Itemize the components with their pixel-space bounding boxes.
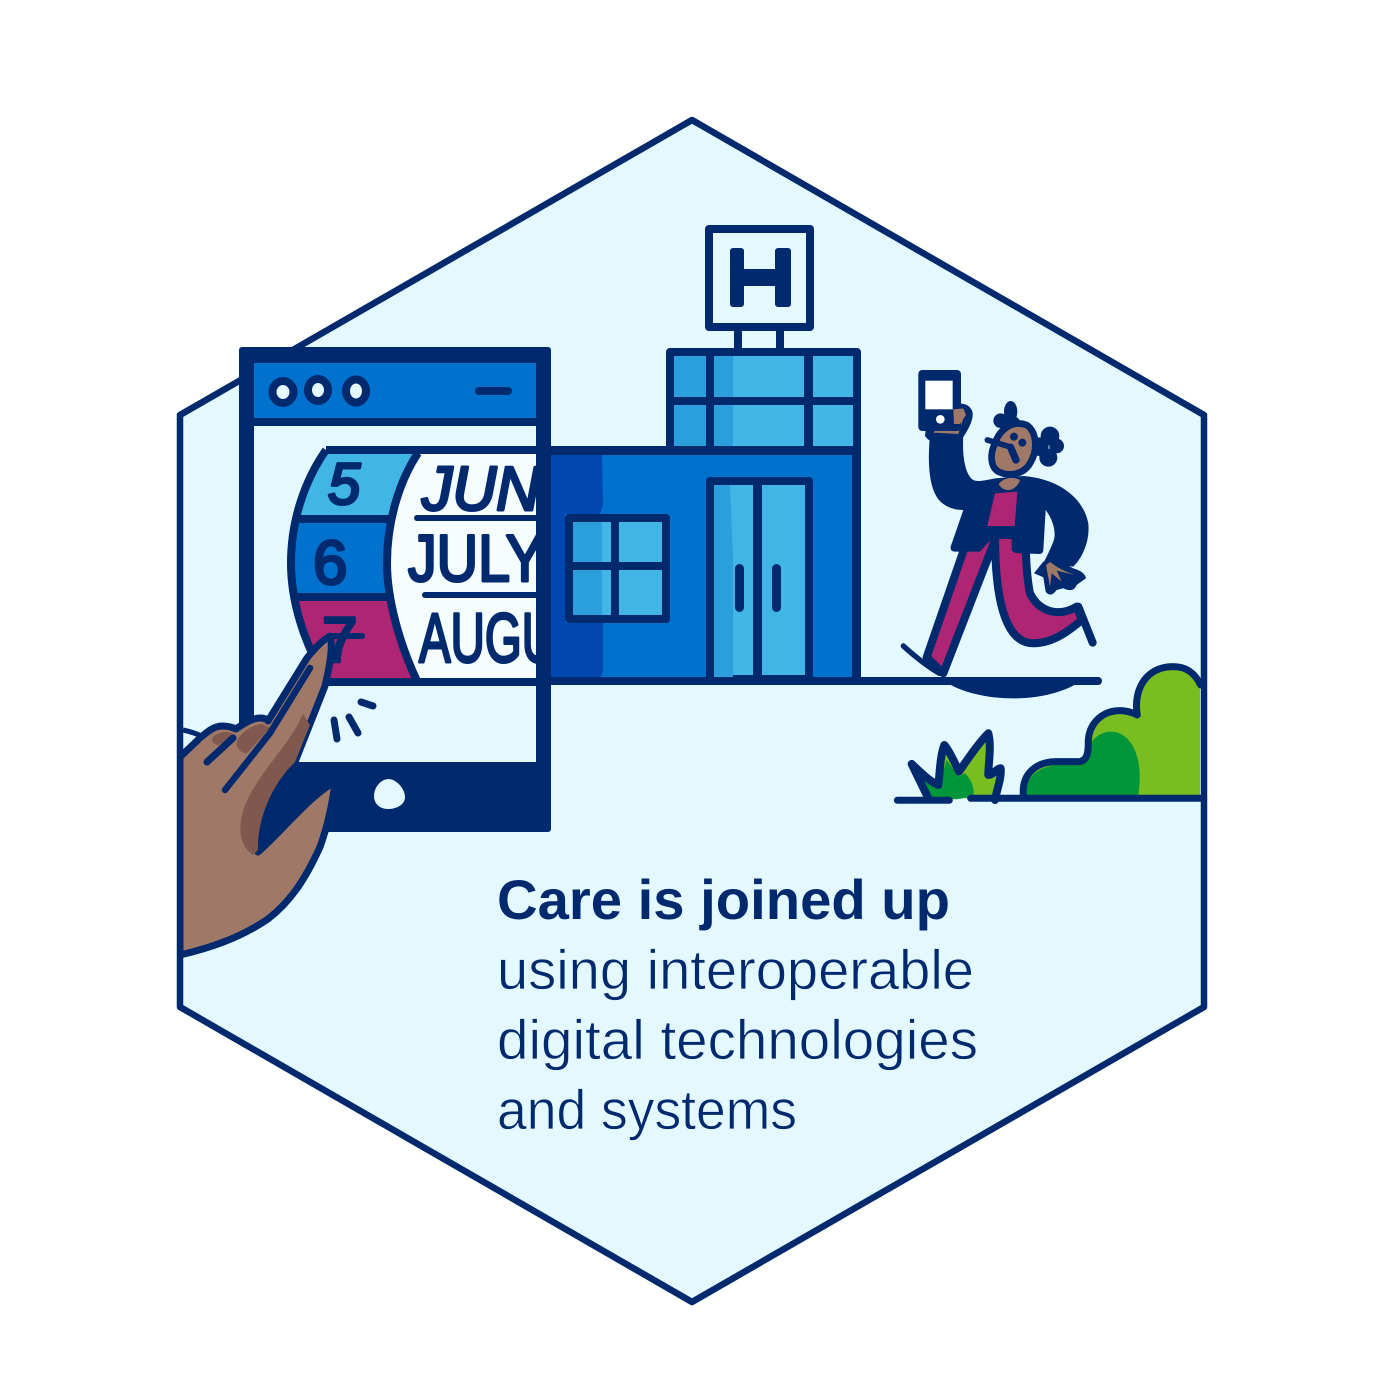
- month names: JUN: [421, 455, 540, 524]
- bushes and plants: [897, 667, 1203, 800]
- phone hand: [925, 403, 973, 442]
- tap marks: [334, 702, 373, 739]
- hospital building: [545, 229, 1098, 681]
- hair: [993, 401, 1064, 467]
- head: [992, 424, 1035, 474]
- finger lines: [225, 668, 310, 790]
- date bands: [291, 450, 536, 682]
- hand pointing at tablet: [180, 636, 335, 955]
- small grass plant: [912, 733, 1001, 800]
- shadow: [945, 682, 1080, 698]
- jacket and arms: [929, 435, 1089, 567]
- caption body: using interoperable: [497, 938, 974, 1001]
- tablet screen: [254, 426, 536, 762]
- home button: [374, 779, 405, 809]
- shirt: [987, 492, 1017, 526]
- door: [710, 481, 809, 679]
- face: [987, 433, 1026, 460]
- month names: JULY: [408, 521, 544, 595]
- large bush: [1023, 667, 1201, 795]
- month names: AUGU: [419, 599, 556, 677]
- upper storey: [670, 352, 857, 451]
- date numbers: [313, 452, 362, 676]
- caption body: [497, 938, 978, 1141]
- caption body: digital technologies: [497, 1008, 978, 1071]
- tablet body: [239, 347, 551, 832]
- hexagon background panel: [180, 120, 1204, 1302]
- lower storey: [551, 446, 861, 681]
- ground line: [545, 677, 1098, 685]
- title bar: [254, 363, 536, 418]
- caption body: and systems: [497, 1078, 797, 1141]
- month names: [408, 466, 536, 664]
- free hand: [1034, 558, 1086, 595]
- tablet with calendar: [239, 347, 556, 852]
- legs: [903, 535, 1093, 673]
- neck: [999, 478, 1020, 490]
- phone: [918, 370, 966, 431]
- caption heading: Care is joined up: [497, 868, 950, 931]
- lower ground line: [897, 798, 1203, 800]
- hospital sign: [709, 229, 810, 351]
- finger shadow: [240, 714, 310, 855]
- window: [569, 518, 666, 619]
- date numbers: 6: [313, 529, 347, 598]
- date numbers: 5: [328, 452, 361, 517]
- person holding phone: [903, 370, 1093, 698]
- date numbers: 7: [322, 604, 358, 676]
- calendar date picker: [290, 450, 556, 682]
- caption text: [497, 868, 978, 1141]
- dark wedge between thumb and finger: [258, 762, 335, 852]
